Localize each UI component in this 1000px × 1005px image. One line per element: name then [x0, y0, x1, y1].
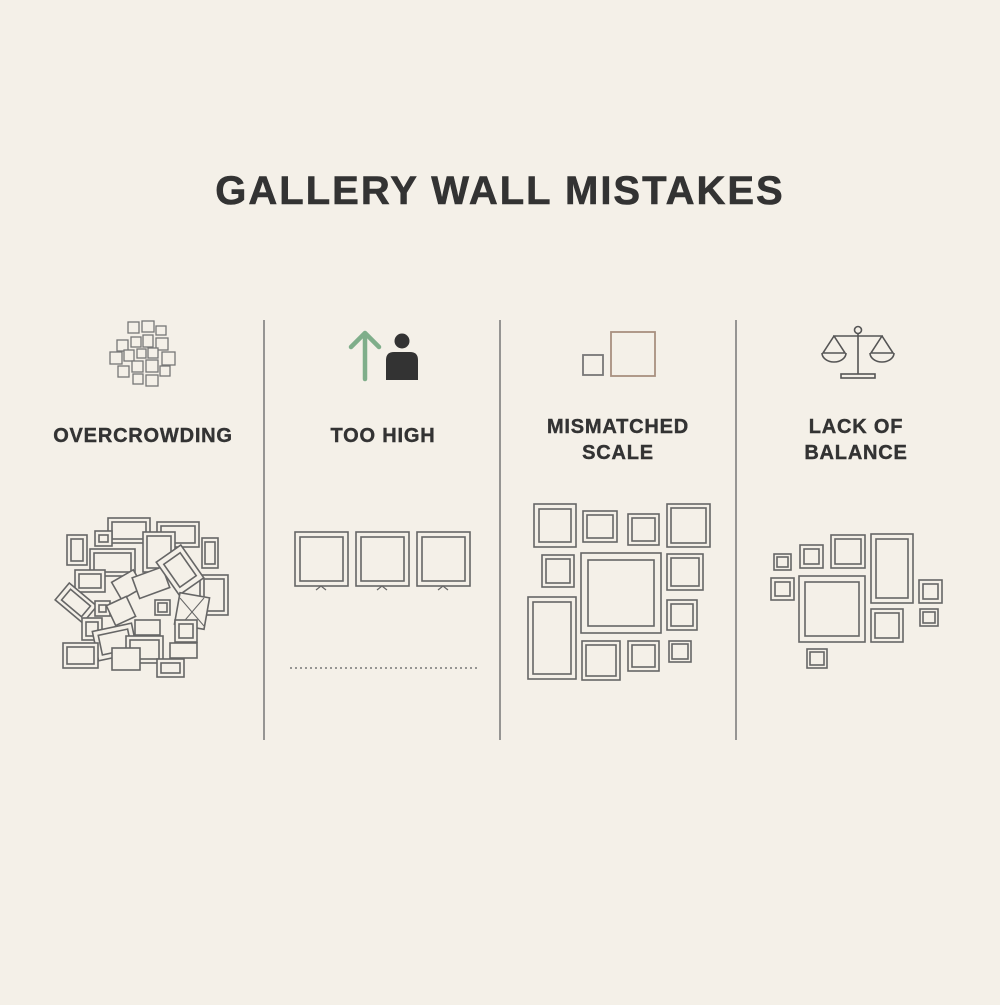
label: too high: TOO HIGH — [331, 425, 435, 447]
panel: mismatched scale — [528, 332, 710, 680]
eye level dotted line — [290, 667, 477, 669]
label: overcrowding: OVERCROWDING — [53, 425, 233, 447]
label: mismatched scale: MISMATCHED — [547, 416, 689, 438]
illustration: unbalanced frames — [771, 534, 942, 668]
icon: arrow up — [351, 333, 379, 379]
icon: frame cluster — [110, 321, 175, 386]
label: lack of balance: LACK OF — [809, 416, 903, 438]
panel: overcrowding — [53, 321, 233, 677]
illustration: high frames — [295, 532, 470, 586]
panel: too high — [290, 333, 477, 668]
panel: lack of balance: BALANCE — [804, 442, 908, 464]
dividers — [264, 320, 736, 740]
illustration: mixed frames — [528, 504, 710, 680]
illustration: chaotic cluster — [55, 518, 228, 677]
panel: lack of balance — [771, 326, 942, 668]
icon: scales — [822, 326, 894, 378]
title: GALLERY WALL MISTAKES — [215, 169, 785, 213]
icon: two squares — [583, 332, 655, 376]
icon: person — [386, 334, 418, 380]
panel: mismatched scale: SCALE — [582, 442, 654, 464]
